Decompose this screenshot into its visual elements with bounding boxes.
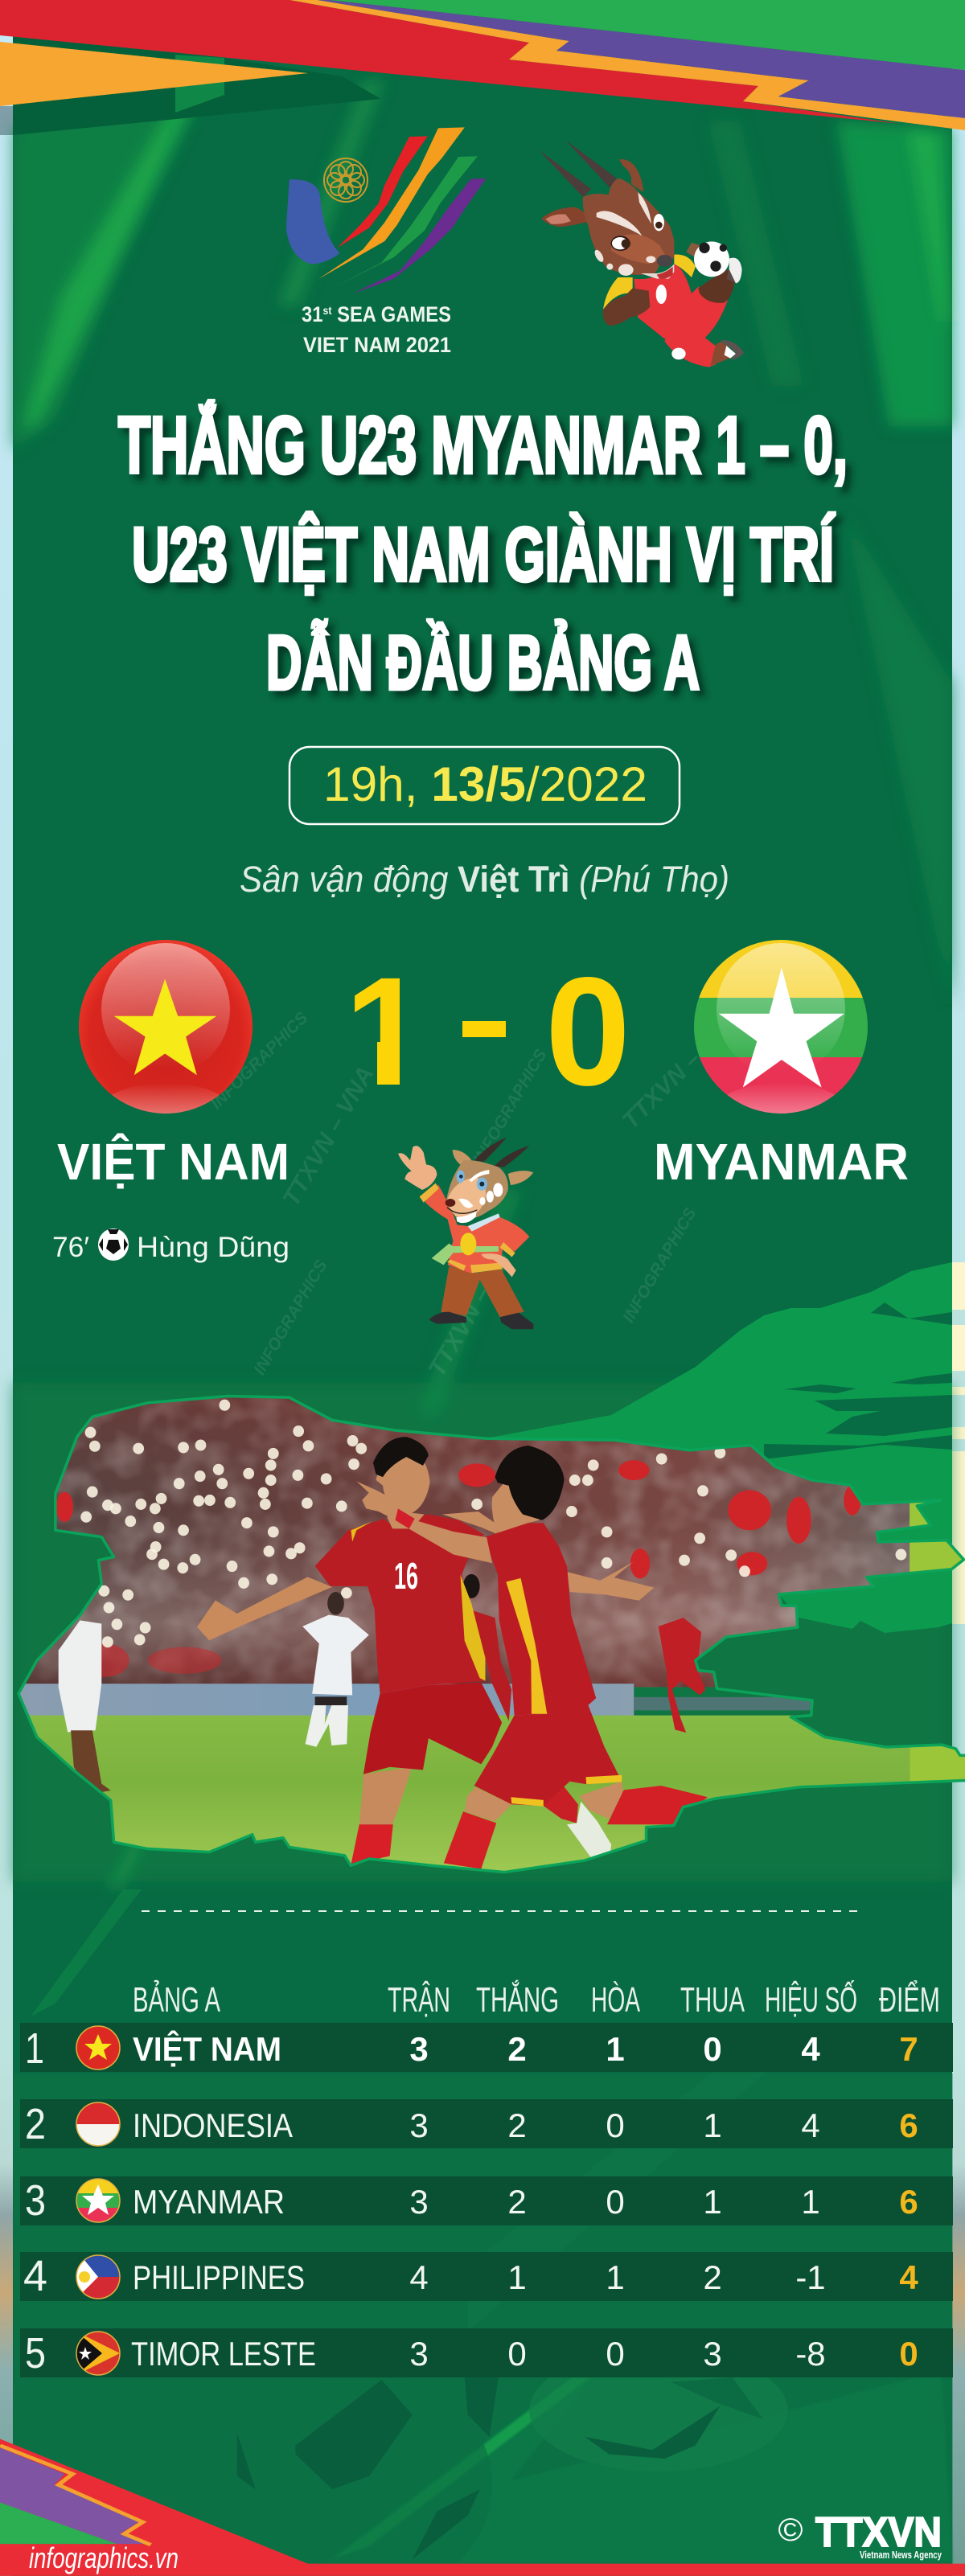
grass <box>0 1716 910 1882</box>
row 5: Timor Leste: 0 <box>606 2335 625 2373</box>
orange triangle <box>0 42 308 106</box>
lime edge patches <box>910 1367 965 1800</box>
flag icon: Timor Leste <box>76 2332 120 2375</box>
table header: THUA <box>680 1980 745 2020</box>
watermarks: INFOGRAPHICS <box>619 1204 700 1326</box>
purple band <box>318 0 965 118</box>
mascot head <box>446 1160 508 1220</box>
lower background: footballs and streaks <box>14 1889 953 2576</box>
venue: Sân vận động Việt Trì (Phú Thọ) <box>240 859 729 900</box>
title: DẪN ĐẦU BẢNG A <box>266 619 700 706</box>
SEA Games logo: VIET NAM 2021 <box>303 333 451 357</box>
watermarks <box>207 1005 747 1381</box>
standings table <box>20 1979 953 2377</box>
orange lightning band <box>290 0 965 130</box>
row 5: Timor Leste: -8 <box>795 2335 826 2373</box>
splatter background behind the photo <box>486 1262 952 1633</box>
row 5: Timor Leste: 3 <box>703 2335 722 2373</box>
team names <box>57 1132 909 1191</box>
logo text: 31 <box>302 302 326 326</box>
watermarks: TTXVN – VNA <box>618 1005 747 1134</box>
row 1: Việt Nam: 0 <box>703 2030 722 2068</box>
logo text: st <box>322 304 332 317</box>
mascot football <box>694 241 729 277</box>
logo purple bolt <box>352 178 487 294</box>
row 1: Việt Nam: 1 <box>25 2024 44 2073</box>
date box: 19h, 13/5/2022 <box>323 757 647 811</box>
row 3: Myanmar: 1 <box>801 2183 820 2221</box>
crowd <box>26 1397 910 1687</box>
row 2: Indonesia: 0 <box>606 2106 625 2144</box>
score <box>344 945 630 1118</box>
logo text: SEA GAMES <box>331 302 451 326</box>
row 5: Timor Leste: 5 <box>25 2329 46 2377</box>
row 2: Indonesia <box>20 2099 953 2148</box>
table header: HIỆU SỐ <box>765 1979 857 2020</box>
watermarks: INFOGRAPHICS <box>250 1257 331 1378</box>
flag: Myanmar <box>694 940 868 1114</box>
TTXVN logo <box>778 2509 942 2561</box>
row 4: Philippines: 4 <box>409 2258 429 2296</box>
bottom corner decoration <box>0 2439 965 2576</box>
pointing arm <box>409 1521 492 1563</box>
logo gold flower <box>324 158 368 202</box>
row 3: Myanmar: MYANMAR <box>133 2183 285 2221</box>
row 2: Indonesia: 1 <box>703 2106 722 2144</box>
row 2: Indonesia: 3 <box>409 2106 429 2144</box>
row 5: Timor Leste <box>20 2328 953 2377</box>
mascot waving <box>398 1138 533 1329</box>
row 2: Indonesia: INDONESIA <box>133 2106 293 2144</box>
row 1: Việt Nam: 4 <box>801 2030 820 2068</box>
table header <box>133 1979 940 2020</box>
TTXVN logo: TTXVN <box>815 2509 942 2556</box>
row 2: Indonesia: 2 <box>507 2106 527 2144</box>
flag: Vietnam <box>79 940 253 1114</box>
row 3: Myanmar: 3 <box>25 2176 46 2225</box>
row 2: Indonesia: 4 <box>801 2106 820 2144</box>
mascot trousers <box>441 1266 524 1317</box>
row 1: Việt Nam: 1 <box>606 2030 625 2068</box>
flag icon: Việt Nam <box>76 2026 120 2069</box>
row 4: Philippines <box>20 2252 953 2301</box>
score: 1 <box>344 945 430 1118</box>
SEA Games logo <box>286 127 487 357</box>
ad boards <box>20 1684 634 1716</box>
row 5: Timor Leste: TIMOR LESTE <box>131 2335 316 2373</box>
photo outline <box>18 1397 965 1873</box>
row 4: Philippines: 1 <box>606 2258 625 2296</box>
table header: THẮNG <box>476 1979 559 2020</box>
row 3: Myanmar: 0 <box>606 2183 625 2221</box>
row 4: Philippines: 4 <box>23 2252 47 2300</box>
flag icon: Indonesia <box>76 2102 120 2146</box>
logo orange bolt <box>318 127 465 279</box>
green corner <box>330 0 965 70</box>
logo green bolt <box>332 156 478 288</box>
watermarks: TTXVN – VNA <box>424 1233 525 1381</box>
icon: football <box>98 1229 129 1261</box>
red band <box>0 0 901 124</box>
row 4: Philippines: 1 <box>507 2258 527 2296</box>
red far player <box>659 1618 705 1733</box>
TTXVN logo: © <box>778 2512 803 2548</box>
team names: VIỆT NAM <box>57 1132 290 1191</box>
table header: BẢNG A <box>133 1979 220 2020</box>
player 16 <box>315 1437 502 1864</box>
third player behind <box>463 1574 511 1721</box>
watermarks: TTXVN – VNA <box>278 1062 380 1211</box>
match photo <box>0 1367 965 1882</box>
jersey number: 16 <box>394 1555 418 1597</box>
flag icon: Myanmar <box>76 2179 120 2222</box>
table header: TRẬN <box>388 1980 450 2020</box>
white player left <box>59 1620 101 1732</box>
goal scorer: 76′ <box>52 1232 89 1263</box>
watermarks: INFOGRAPHICS <box>470 1046 551 1167</box>
player 16 left arm <box>197 1577 332 1640</box>
mascot belt and medal <box>432 1244 499 1265</box>
row 3: Myanmar: 1 <box>703 2183 722 2221</box>
team names: MYANMAR <box>654 1133 909 1191</box>
mascot hands <box>398 1146 437 1190</box>
row 3: Myanmar: 6 <box>899 2183 918 2221</box>
row 4: Philippines: PHILIPPINES <box>133 2258 305 2296</box>
mascot kicking a ball <box>539 140 744 367</box>
date box <box>290 747 680 824</box>
row 5: Timor Leste: 0 <box>507 2335 527 2373</box>
row 1: Việt Nam: 2 <box>507 2030 527 2068</box>
row 1: Việt Nam: 3 <box>409 2030 429 2068</box>
row 1: Việt Nam: VIỆT NAM <box>133 2029 281 2068</box>
website label: infographics.vn <box>29 2541 179 2574</box>
watermarks: INFOGRAPHICS <box>207 1008 311 1113</box>
mascot body <box>634 264 692 339</box>
mascot shirt <box>425 1184 529 1273</box>
title <box>118 400 848 706</box>
row 4: Philippines: -1 <box>795 2258 826 2296</box>
goal scorer: Hùng Dũng <box>137 1232 290 1263</box>
row 5: Timor Leste: 3 <box>409 2335 429 2373</box>
mascot head <box>583 178 674 275</box>
goal scorer <box>52 1229 290 1263</box>
row 1: Việt Nam: 7 <box>899 2030 918 2068</box>
row 4: Philippines: 2 <box>703 2258 722 2296</box>
dashed divider <box>142 1910 857 1912</box>
row 4: Philippines: 4 <box>899 2258 918 2296</box>
flag icon: Philippines <box>76 2255 120 2299</box>
row 5: Timor Leste: 0 <box>899 2335 918 2373</box>
white player centre <box>302 1592 369 1747</box>
player 2 <box>356 1446 708 1869</box>
mascot red leg <box>665 287 728 367</box>
table header: ĐIỂM <box>879 1979 940 2020</box>
logo red bolt <box>337 136 428 248</box>
row 3: Myanmar: 3 <box>409 2183 429 2221</box>
table header: HÒA <box>591 1980 640 2020</box>
stadium flags <box>56 1460 861 1677</box>
phone lights <box>80 1400 906 1647</box>
row 2: Indonesia: 2 <box>25 2100 46 2148</box>
row 3: Myanmar <box>20 2176 953 2225</box>
row 3: Myanmar: 2 <box>507 2183 527 2221</box>
row 1: Việt Nam <box>20 2023 953 2073</box>
logo blue stroke <box>286 179 339 264</box>
score: 0 <box>545 945 630 1118</box>
top decoration: shadow, triangle and bands <box>0 0 965 135</box>
row 2: Indonesia: 6 <box>899 2106 918 2144</box>
